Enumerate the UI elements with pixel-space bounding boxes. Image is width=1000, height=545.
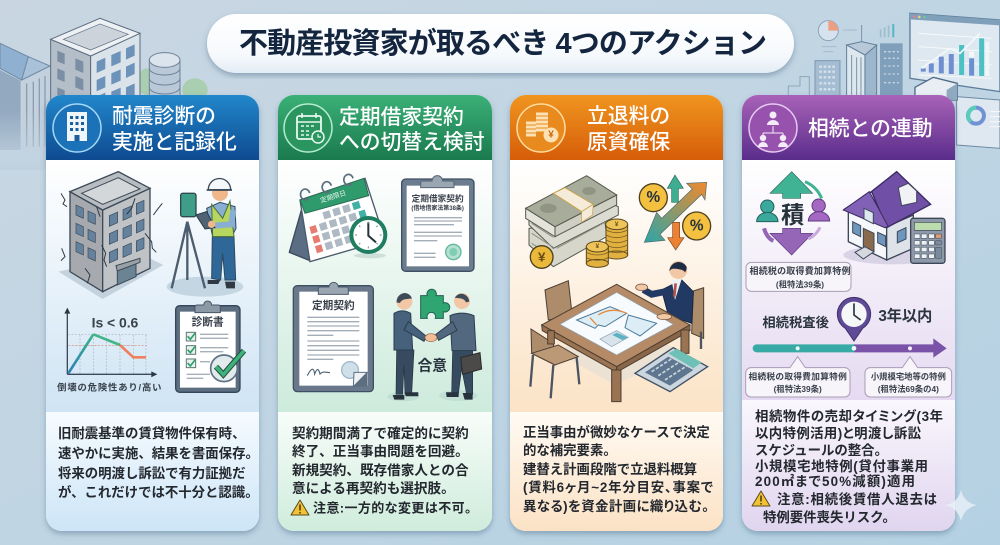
callout: 相続税の取得費加算特例 top — [746, 262, 851, 291]
header title: への切替え検討 — [339, 130, 485, 154]
illustration: 定期契約 clipboard — [293, 282, 373, 392]
callout: 相続税の取得費加算特例 bottom: 相続税の取得費加算特例 — [748, 371, 847, 382]
illustration: 定期借家契約 clipboard: (借地借家法第38条) — [411, 204, 464, 212]
illustration: banknotes and coins: ¥ — [615, 221, 619, 228]
callout: 相続税の取得費加算特例 bottom — [746, 357, 850, 397]
caution text: 注意:一方的な変更は不可。 — [313, 500, 478, 516]
text background — [742, 400, 955, 531]
background illustration: city buildings left — [0, 18, 208, 150]
illustration: calendar and clock: 定期限日 — [319, 188, 347, 205]
illustration: handshake agreement — [387, 289, 482, 401]
timeline: 3年以内 — [878, 307, 932, 325]
body text: 以内特例活用)と明渡し訴訟 — [755, 424, 922, 440]
icon: warning — [291, 500, 309, 515]
illustration background — [46, 160, 259, 412]
text background — [46, 412, 259, 531]
body text: スケジュールの整合。 — [755, 442, 888, 458]
text background — [278, 412, 492, 531]
body text: が、これだけでは不十分と認識。 — [58, 484, 259, 500]
body text: 速やかに実施、結果を書面保存。 — [58, 444, 259, 460]
body text: 終了、正当事由問題を回避。 — [292, 442, 469, 458]
timeline: 相続税査後 — [762, 314, 830, 330]
callout: 小規模宅地等の特例: 小規模宅地等の特例 — [871, 372, 946, 382]
illustration: banknotes and coins — [526, 176, 628, 268]
illustration: 診断書 clipboard — [176, 301, 244, 392]
body text: 建替え計画段階で立退料概算 — [523, 460, 697, 476]
body text: 契約期間満了で確定的に契約 — [292, 424, 469, 440]
header title: 相続との連動 — [808, 118, 933, 140]
chart: Is value: Is < 0.6 — [92, 314, 139, 330]
text background — [510, 412, 723, 531]
icon: family tree — [749, 104, 797, 152]
illustration: meeting table — [530, 261, 708, 402]
header title: 実施と記録化 — [112, 130, 237, 154]
chart: Is value: 倒壊の危険性あり/高い — [57, 382, 161, 393]
icon: coins — [517, 104, 565, 152]
panel: 相続との連動 — [742, 95, 955, 531]
illustration background — [278, 160, 492, 412]
illustration: banknotes and coins: ¥ — [538, 249, 546, 264]
illustration: percent arrows — [639, 175, 711, 250]
title banner: 不動産投資家が取るべき 4つのアクション — [239, 26, 767, 60]
panel: 立退料 — [510, 95, 723, 531]
header title: 耐震診断の — [112, 104, 216, 128]
body text: 小規模宅地特例(貸付事業用 — [755, 458, 928, 474]
illustration: surveyor with tripod — [167, 179, 243, 297]
panel header — [742, 95, 955, 160]
illustration: calendar and clock — [289, 174, 387, 262]
illustration: house and calculator — [843, 172, 945, 264]
callout: 小規模宅地等の特例: (租特法69条の4) — [878, 384, 939, 394]
timeline — [746, 297, 952, 397]
body text: 200㎡まで50%減額)適用 — [755, 472, 915, 488]
illustration: inheritance cycle — [757, 172, 830, 255]
illustration: percent arrows: % — [690, 217, 704, 234]
illustration: percent arrows: % — [646, 189, 660, 206]
illustration: inheritance cycle: 積 — [781, 202, 804, 228]
panel: 定期借家契約 — [278, 95, 492, 531]
callout: 小規模宅地等の特例 — [865, 357, 952, 397]
panel header — [278, 95, 492, 160]
icon: sparkle — [945, 490, 977, 521]
illustration background — [742, 160, 955, 400]
header title: 立退料の — [587, 104, 670, 128]
background illustration: dashboard and city right — [788, 13, 1000, 148]
body text: 意による再契約も選択肢。 — [292, 480, 455, 496]
caution text: 特例要件喪失リスク。 — [763, 508, 896, 524]
body text: 正当事由が微妙なケースで決定 — [523, 424, 710, 440]
title banner — [207, 14, 794, 73]
callout: 相続税の取得費加算特例 top: 相続税の取得費加算特例 — [749, 265, 851, 276]
callout: 相続税の取得費加算特例 bottom: (租特法39条) — [774, 384, 822, 394]
body text: (賃料6ヶ月~2年分目安、事案で — [523, 478, 713, 494]
body text: 新規契約、既存借家人との合 — [292, 462, 469, 478]
illustration: 定期借家契約 clipboard — [402, 176, 474, 271]
body text: 的な補完要素。 — [523, 442, 617, 458]
panel: 耐震診断 — [46, 95, 259, 531]
icon: office building — [53, 104, 101, 152]
illustration: handshake agreement: 合意 — [418, 358, 447, 375]
caution text: 注意:相続後賃借人退去は — [777, 490, 937, 506]
body text: 旧耐震基準の賃貸物件保有時、 — [58, 424, 245, 440]
illustration: 定期契約 clipboard: 定期契約 — [312, 299, 355, 312]
illustration: banknotes and coins: ¥ — [595, 243, 599, 250]
illustration: cracked building — [58, 172, 163, 299]
body text: 相続物件の売却タイミング(3年 — [755, 408, 943, 424]
header title: 定期借家契約 — [339, 106, 464, 128]
header title: 原資確保 — [587, 130, 670, 154]
body text: 異なる)を資金計画に織り込む。 — [523, 498, 709, 514]
icon: warning — [752, 491, 770, 506]
illustration background — [510, 160, 723, 412]
panel header — [510, 95, 723, 160]
illustration: 定期借家契約 clipboard: 定期借家契約 — [412, 192, 464, 203]
icon: coins: ¥ — [548, 130, 554, 140]
panel header — [46, 95, 259, 160]
icon: calendar clock — [284, 104, 332, 152]
callout: 相続税の取得費加算特例 top: (租特法39条) — [776, 279, 824, 289]
body text: 将来の明渡し訴訟で有力証拠だ — [58, 464, 245, 480]
illustration: 診断書 clipboard: 診断書 — [192, 316, 224, 329]
chart: Is value — [57, 308, 161, 393]
